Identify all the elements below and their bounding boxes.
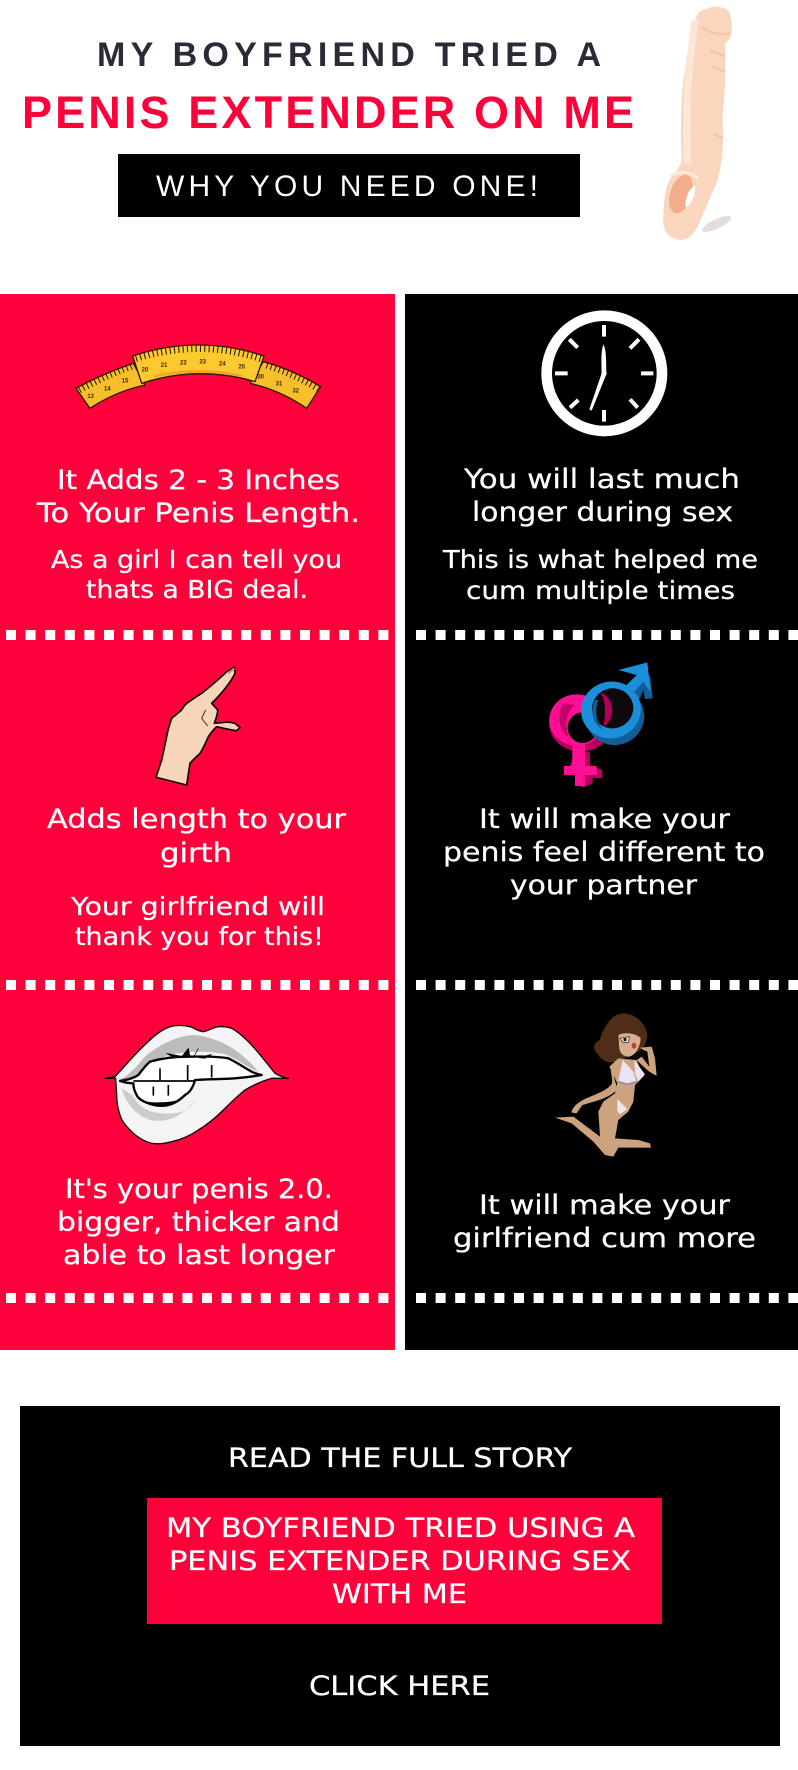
text: penis 2.0: bigger, thicker and: [57, 1207, 340, 1238]
text: girth headline: [47, 804, 347, 869]
panel: red benefits column: [0, 294, 395, 1350]
icon: measuring tape: 32: [292, 389, 300, 395]
text: last longer headline: [463, 464, 740, 528]
callout: article title: WITH ME: [332, 1579, 467, 1610]
text: click here: CLICK HERE: [309, 1671, 490, 1702]
header: [22, 36, 634, 217]
icon: measuring tape: 30: [257, 375, 265, 381]
text: feel different: your partner: [510, 870, 698, 901]
icon: penis extender product: [663, 7, 733, 240]
icon: kneeling woman: [555, 1013, 657, 1157]
subtitle banner: WHY YOU NEED ONE!: [156, 170, 538, 203]
text: girth note: thank you for this!: [75, 922, 324, 951]
text: feel different: penis feel different to: [443, 837, 765, 868]
icon: measuring tape: 31: [276, 381, 283, 387]
panel: black benefits column: [405, 294, 798, 1350]
text: feel different: [443, 804, 765, 901]
icon: measuring tape: [76, 345, 321, 408]
text: last longer headline: You will last much: [463, 464, 740, 495]
text: girlfriend cum more: It will make your: [479, 1190, 731, 1221]
text: last longer note: cum multiple times: [466, 576, 735, 605]
text: length headline: It Adds 2 - 3 Inches: [57, 465, 340, 496]
icon: measuring tape: 23: [199, 360, 207, 366]
text: girlfriend cum more: girlfriend cum more: [453, 1223, 756, 1254]
icon: measuring tape: 13: [87, 394, 95, 400]
icon: measuring tape: 15: [122, 379, 129, 385]
dotted divider row 1: [6, 630, 798, 640]
text: read the full story: READ THE FULL STORY: [228, 1443, 573, 1474]
callout: article title: [147, 1498, 662, 1624]
text: length note: [51, 545, 342, 604]
text: length note: thats a BIG deal.: [86, 575, 308, 604]
title line 2: PENIS EXTENDER ON ME: [22, 87, 634, 138]
text: feel different: It will make your: [479, 804, 731, 835]
icon: measuring tape: 14: [104, 386, 111, 392]
text: length headline: [36, 465, 360, 529]
icon: measuring tape: 22: [180, 361, 187, 367]
icon: pointing hand: [156, 667, 240, 785]
icon: clock: [547, 316, 662, 431]
text: last longer headline: longer during sex: [472, 497, 733, 528]
callout: article title: MY BOYFRIEND TRIED USING A: [166, 1513, 636, 1544]
text: penis 2.0: able to last longer: [63, 1240, 336, 1271]
icon: measuring tape: 20: [142, 367, 149, 373]
panel: call to action: [20, 1406, 780, 1746]
text: girth headline: Adds length to your: [47, 804, 347, 835]
dotted divider row 3: [6, 1293, 798, 1303]
text: girth headline: girth: [160, 838, 232, 869]
dotted divider row 2: [6, 980, 798, 990]
text: girlfriend cum more: [453, 1190, 756, 1254]
text: last longer note: [442, 545, 758, 605]
title line 1: MY BOYFRIEND TRIED A: [97, 36, 601, 74]
icon: biting lips: [105, 1025, 288, 1144]
text: penis 2.0: [57, 1174, 340, 1271]
icon: gender symbols: [549, 662, 653, 788]
text: girth note: Your girlfriend will: [70, 892, 325, 921]
text: penis 2.0: It's your penis 2.0.: [65, 1174, 333, 1205]
text: last longer note: This is what helped me: [442, 545, 758, 574]
icon: measuring tape: 24: [219, 361, 226, 367]
icon: measuring tape: 21: [161, 363, 168, 369]
icon: measuring tape: 25: [238, 365, 246, 371]
subtitle banner: [118, 154, 580, 217]
text: length note: As a girl I can tell you: [51, 545, 342, 574]
text: length headline: To Your Penis Length.: [36, 498, 360, 529]
text: girth note: [70, 892, 325, 951]
callout: article title: PENIS EXTENDER DURING SEX: [169, 1546, 631, 1577]
